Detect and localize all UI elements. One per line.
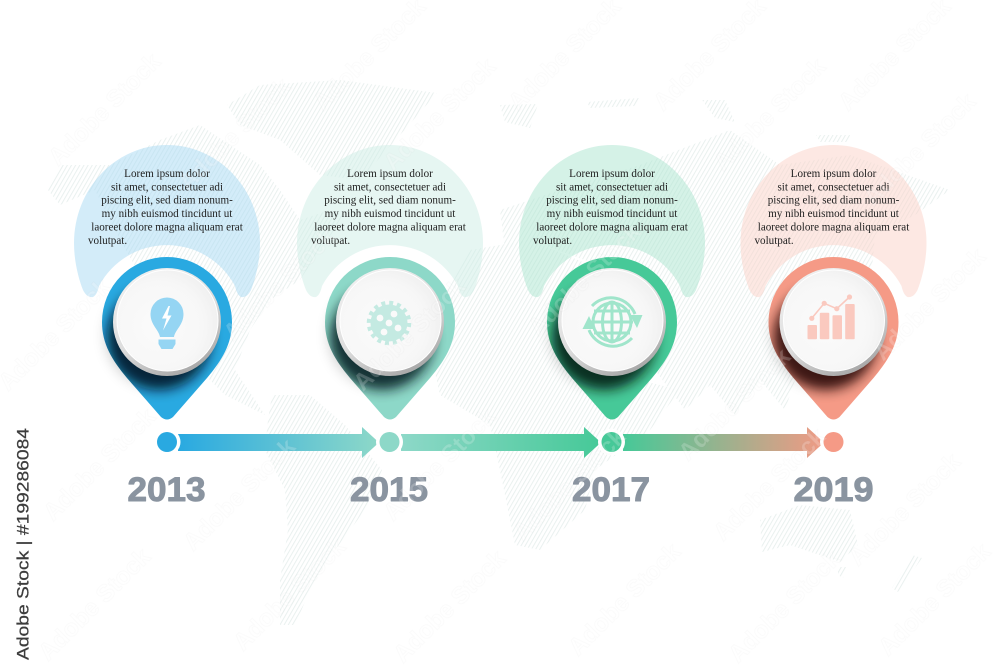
watermark: Adobe Stock xyxy=(218,223,342,346)
watermark: Adobe Stock xyxy=(563,538,687,661)
watermark: Adobe Stock xyxy=(228,533,352,656)
bubble text: 2019: sit amet, consectetuer adi xyxy=(777,181,890,193)
watermark: Adobe Stock xyxy=(43,48,167,171)
bubble text: 2017: laoreet dolore magna aliquam erat xyxy=(536,221,689,233)
bubble text: 2013: sit amet, consectetuer adi xyxy=(111,181,223,193)
timeline dot: 2019 xyxy=(820,428,847,456)
map pin: 2013 xyxy=(102,257,232,420)
bubble text: 2019: volutpat. xyxy=(754,235,794,247)
timeline dot: 2013 xyxy=(154,428,180,456)
watermark: Adobe Stock xyxy=(708,423,832,546)
watermark: Adobe Stock xyxy=(378,53,502,176)
pin inner shadow xyxy=(552,286,656,390)
white disc xyxy=(113,268,221,376)
bubble text: 2015: piscing elit, sed diam nonum- xyxy=(324,195,456,207)
pin inner shadow xyxy=(330,286,434,390)
watermark: Adobe Stock xyxy=(178,433,302,556)
bubble text: 2019: my nibh euismod tincidunt ut xyxy=(768,208,900,220)
watermark: Adobe Stock xyxy=(33,543,157,666)
pin inner shadow xyxy=(774,286,878,390)
timeline dot: 2015 xyxy=(376,428,403,456)
bubble text: 2015: sit amet, consectetuer adi xyxy=(334,181,446,193)
text bubble: 2017 xyxy=(519,145,705,297)
pin inner shadow xyxy=(107,286,211,390)
timeline dot: 2017 xyxy=(598,428,625,456)
bubble text: 2019: Lorem ipsum dolor xyxy=(791,168,877,180)
timeline milestone: 2019 xyxy=(740,145,926,420)
bubble text: 2017: Lorem ipsum dolor xyxy=(569,168,655,180)
bubble text: 2017: sit amet, consectetuer adi xyxy=(556,181,668,193)
bubble text: 2015: volutpat. xyxy=(311,235,350,247)
bubble text: 2013: Lorem ipsum dolor xyxy=(124,168,210,180)
icon: bar chart with trend line xyxy=(808,294,855,339)
year label: 2019: 2019 xyxy=(794,471,874,509)
watermark: Adobe Stock xyxy=(858,88,982,211)
world map background xyxy=(48,80,950,625)
bubble text: 2013: my nibh euismod tincidunt ut xyxy=(102,208,233,220)
bubble text: 2017: my nibh euismod tincidunt ut xyxy=(547,208,678,220)
icon: gear xyxy=(369,303,409,343)
soft outer shadow xyxy=(106,283,210,387)
watermark: Adobe Stock xyxy=(723,545,847,667)
watermark: Adobe Stock xyxy=(873,538,997,661)
white disc xyxy=(336,268,444,376)
map pin: 2015 xyxy=(325,257,455,420)
watermark: Adobe Stock xyxy=(508,423,632,546)
timeline milestone: 2017 xyxy=(519,145,705,420)
bubble text: 2013: volutpat. xyxy=(88,235,127,247)
icon: light bulb xyxy=(150,298,184,349)
watermark: Adobe Stock xyxy=(388,545,512,667)
timeline milestone: 2015 xyxy=(297,145,483,420)
watermark: Adobe Stock xyxy=(173,73,297,196)
icon: globe with arrows xyxy=(582,298,642,346)
bubble text: 2019: laoreet dolore magna aliquam erat xyxy=(758,221,910,233)
timeline milestone: 2013 xyxy=(74,145,260,420)
bubble text: 2015: laoreet dolore magna aliquam erat xyxy=(314,221,467,233)
year label: 2015: 2015 xyxy=(350,471,428,509)
watermark: Adobe Stock xyxy=(378,403,502,526)
map pin: 2017 xyxy=(547,257,677,420)
text bubble: 2015 xyxy=(297,145,483,297)
bubble text: 2015: my nibh euismod tincidunt ut xyxy=(325,208,456,220)
bubble text: 2019: piscing elit, sed diam nonum- xyxy=(768,195,900,207)
white disc xyxy=(780,268,888,376)
watermark: Adobe Stock xyxy=(843,448,967,571)
watermark: Adobe Stock xyxy=(523,218,647,341)
text bubble: 2019 xyxy=(740,145,926,297)
bubble text: 2015: Lorem ipsum dolor xyxy=(347,168,433,180)
watermark: Adobe Stock xyxy=(673,343,797,466)
year label: 2017: 2017 xyxy=(572,471,650,509)
white disc xyxy=(558,268,666,376)
soft outer shadow xyxy=(772,283,876,387)
year label: 2013: 2013 xyxy=(128,471,206,509)
text bubble: 2013 xyxy=(74,145,260,297)
watermark: Adobe Stock xyxy=(38,403,162,526)
arrow: 2015 to 2017 xyxy=(401,427,601,458)
soft outer shadow xyxy=(551,283,655,387)
soft outer shadow xyxy=(329,283,433,387)
arrow: 2013 to 2015 xyxy=(178,427,379,458)
watermark: Adobe Stock xyxy=(708,53,832,176)
bubble text: 2013: piscing elit, sed diam nonum- xyxy=(101,195,233,207)
map pin: 2019 xyxy=(768,257,898,420)
stock credit: Adobe Stock | #199286084 xyxy=(14,428,32,660)
arrow: 2017 to 2019 xyxy=(623,427,824,458)
bubble text: 2017: piscing elit, sed diam nonum- xyxy=(546,195,678,207)
watermark: Adobe Stock xyxy=(348,273,472,396)
bubble text: 2013: laoreet dolore magna aliquam erat xyxy=(91,221,244,233)
watermark: Adobe Stock xyxy=(868,243,992,366)
bubble text: 2017: volutpat. xyxy=(533,235,572,247)
